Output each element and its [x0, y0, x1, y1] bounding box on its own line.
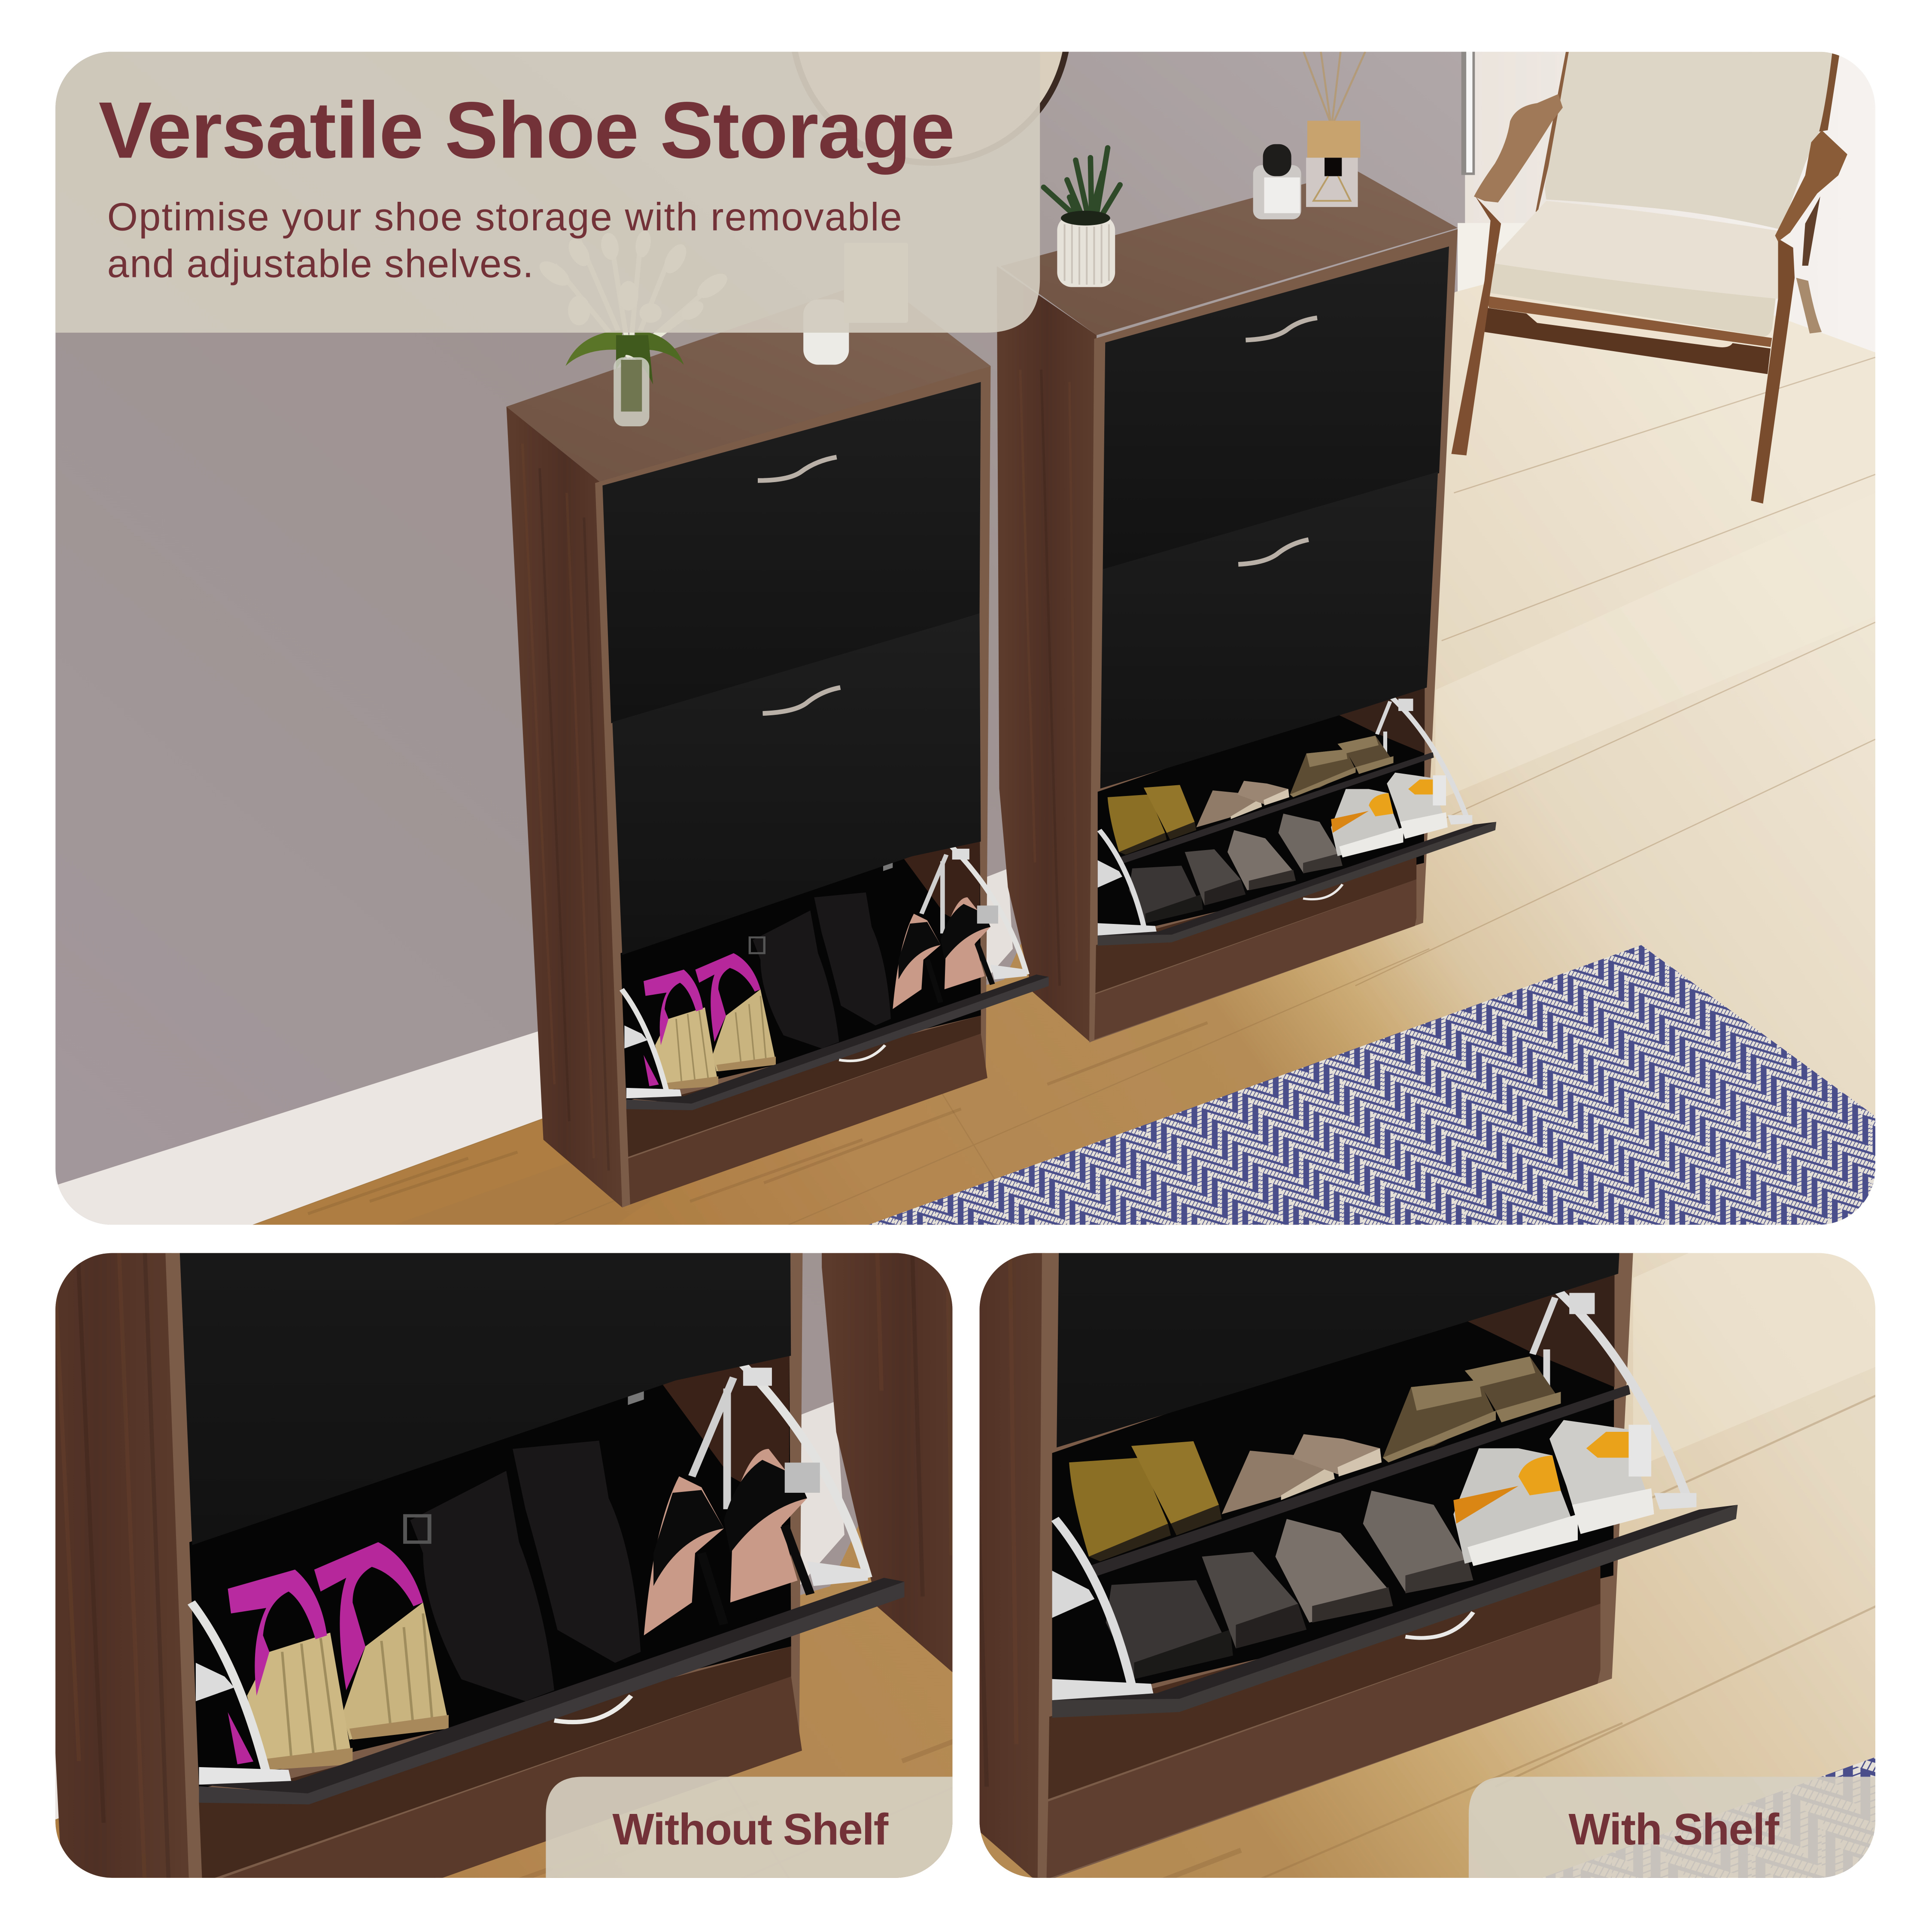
title: Versatile Shoe Storage: [99, 85, 955, 175]
lower row shoes: [1129, 773, 1448, 923]
decor: perfume bottle: [1253, 144, 1301, 219]
decor: potted plant: [1044, 148, 1120, 287]
left cabinet handles: [758, 457, 840, 714]
floor: [252, 252, 1875, 1232]
black ankle boots: [750, 893, 891, 1048]
left cabinet top door: [602, 382, 981, 723]
right cabinet side panel: [997, 266, 1097, 1042]
title panel: [55, 52, 1040, 333]
left cabinet front frame: [595, 366, 990, 1208]
label box: with shelf: [1469, 1777, 1875, 1885]
description text: [107, 195, 902, 286]
left cabinet second door: [612, 614, 981, 955]
rug: [869, 945, 1875, 1232]
left cabinet side panel: [507, 407, 622, 1207]
decor: round wall mirror: [792, 0, 1068, 163]
chair left arm and leg: [1451, 197, 1501, 456]
right cabinet second door: [1100, 472, 1438, 789]
panel: main room scene: [55, 0, 1884, 1232]
cabinet: right shoe cabinet: [997, 170, 1496, 1042]
label box: without shelf: [546, 1777, 952, 1885]
wall: [55, 52, 1467, 1225]
description text: and adjustable shelves.: [107, 242, 534, 286]
description text: Optimise your shoe storage with removable: [107, 195, 902, 239]
right cabinet lower details, zoom-space coordinates: [1094, 680, 1496, 1039]
hinge brackets: [1100, 696, 1467, 926]
right cabinet top door: [1103, 246, 1449, 571]
chair backrest cushion: [1545, 52, 1832, 230]
left cabinet lower details, zoom-space coordinates: [620, 825, 1049, 1204]
chair seat cushion: [1487, 201, 1780, 337]
right cabinet handles: [1238, 318, 1317, 564]
drop-down flap: [626, 975, 1049, 1104]
right cabinet front frame: [1089, 229, 1458, 1042]
removable shelf: [1119, 752, 1434, 864]
drop-down flap: [1098, 822, 1496, 936]
upper row shoes: [1108, 735, 1394, 855]
chair frame rail: [1485, 308, 1771, 374]
decor: calla lily vase: [535, 229, 731, 426]
hinge brackets: [622, 843, 1027, 1091]
black stiletto heels: [893, 897, 992, 1009]
room scene with both cabinets: [55, 0, 1884, 1232]
decor: cream bottle: [844, 243, 908, 323]
wedge sandals: [644, 953, 776, 1090]
armchair: [1451, 52, 1847, 504]
right cabinet top surface: [1000, 170, 1458, 335]
window and bright back wall: [1458, 52, 1875, 352]
cabinet: left shoe cabinet: [507, 279, 1049, 1207]
skirting board: [55, 1030, 548, 1225]
chair right arm and leg: [1751, 239, 1795, 504]
decor: reed diffuser: [1303, 52, 1365, 207]
left cabinet top surface: [507, 279, 990, 483]
label: without shelf: Without Shelf: [612, 1804, 889, 1854]
label: with shelf: With Shelf: [1568, 1804, 1780, 1854]
decor: candle: [803, 299, 849, 365]
